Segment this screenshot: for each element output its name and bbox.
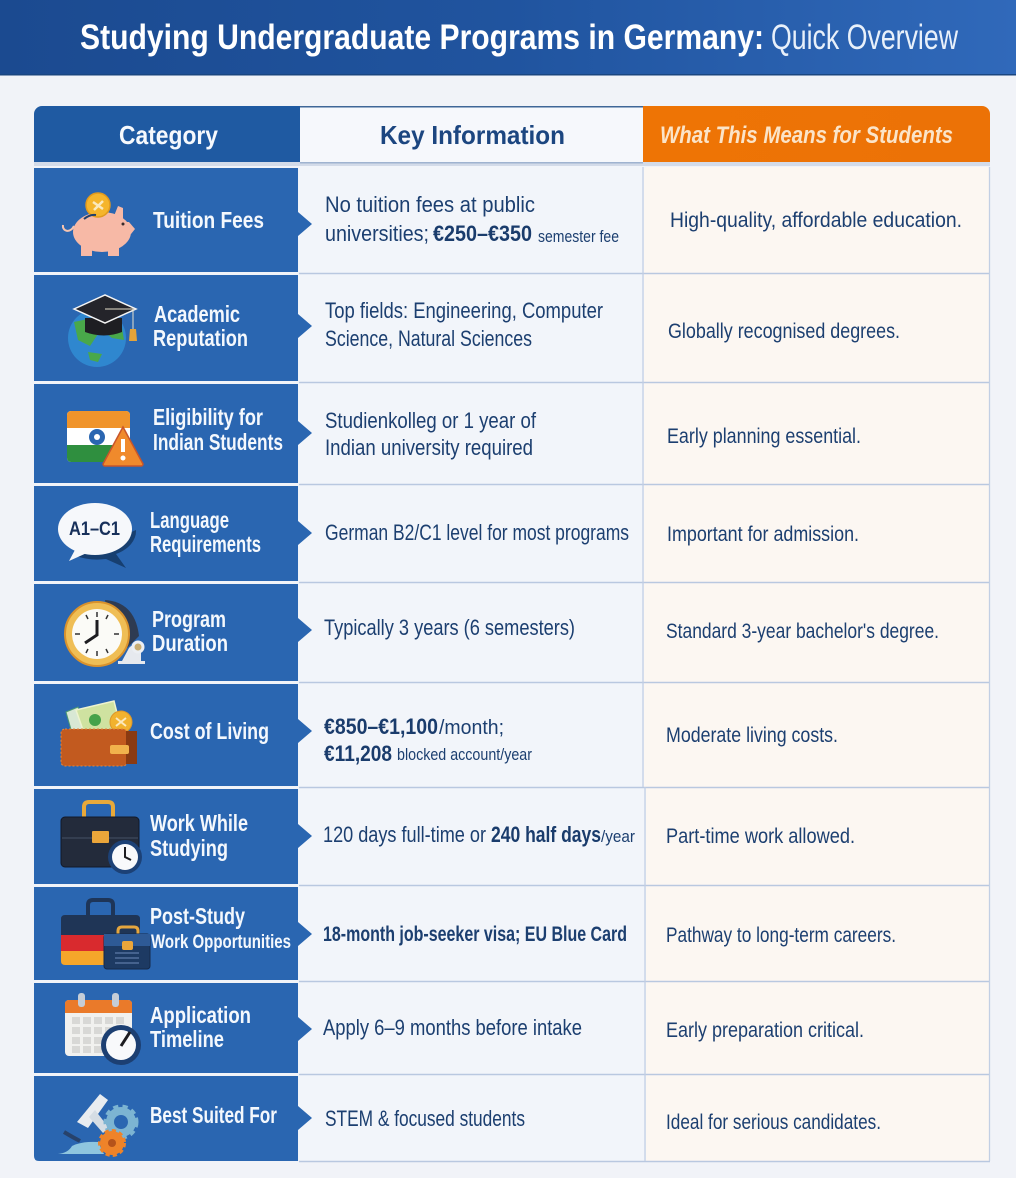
row 9: application timeline — [34, 983, 864, 1073]
icon: Indian flag with warning — [67, 411, 143, 466]
label: Timeline — [150, 1026, 224, 1052]
row 3: eligibility — [34, 384, 861, 483]
key information: 18-month job-seeker visa; EU Blue Card — [323, 923, 627, 946]
label: Application — [150, 1002, 251, 1028]
row 10: best suited for — [34, 1076, 881, 1161]
key information — [325, 408, 537, 460]
category cell — [34, 983, 312, 1073]
student meaning: Pathway to long-term careers. — [666, 924, 896, 947]
key information: €250–€350 — [433, 221, 532, 246]
label: Cost of Living — [150, 718, 269, 744]
icon: microscope and gears — [58, 1094, 136, 1155]
label: Program — [152, 606, 226, 632]
key information: Indian university required — [325, 435, 533, 460]
key information: STEM & focused students — [325, 1106, 525, 1131]
icon: briefcase with clock — [61, 802, 142, 874]
icon: speech bubble: A1–C1 — [69, 519, 120, 540]
row 1: tuition fees — [34, 168, 962, 272]
icon: piggy bank — [63, 193, 135, 256]
key information: blocked account/year — [397, 745, 532, 764]
category cell — [34, 684, 312, 786]
label — [150, 1002, 251, 1052]
key information: universities; — [325, 221, 429, 246]
key information: /month; — [439, 717, 504, 739]
table background columns — [299, 166, 990, 1162]
key information: German B2/C1 level for most programs — [325, 520, 629, 545]
category cell — [34, 384, 312, 483]
student meaning: High-quality, affordable education. — [670, 209, 962, 232]
title text: Quick Overview — [771, 18, 959, 57]
student meaning: Important for admission. — [667, 523, 859, 546]
title text: Studying Undergraduate Programs in Germany: — [80, 18, 764, 57]
key information: Typically 3 years (6 semesters) — [324, 615, 575, 640]
key information: Apply 6–9 months before intake — [323, 1015, 582, 1040]
key information: €850–€1,100 — [324, 714, 438, 739]
row 5: duration — [34, 584, 939, 681]
student meaning: Globally recognised degrees. — [668, 320, 900, 343]
icon: German flag briefcases — [61, 900, 150, 969]
label — [150, 507, 261, 557]
category cell — [34, 584, 312, 681]
label: Indian Students — [153, 429, 283, 455]
student meaning: Ideal for serious candidates. — [666, 1111, 881, 1134]
row 6: cost of living — [34, 684, 838, 786]
label — [153, 301, 248, 351]
icon: clock — [65, 600, 145, 666]
row 8: post-study work — [34, 887, 896, 980]
label: Duration — [152, 630, 228, 656]
label — [150, 903, 291, 953]
icon: wallet with money — [61, 701, 137, 766]
category cell — [34, 168, 312, 272]
label: Academic — [154, 301, 240, 327]
row 4: language — [34, 486, 859, 581]
student meaning: Early planning essential. — [667, 425, 861, 448]
header: key information — [300, 106, 643, 164]
header: what this means for students — [643, 106, 990, 162]
icon: globe with graduation cap — [68, 295, 137, 367]
key information: 240 half days — [491, 822, 601, 847]
label: Work Opportunities — [151, 932, 291, 953]
label — [150, 810, 248, 861]
key information: 120 days full-time or — [323, 822, 486, 847]
category cell — [34, 1076, 312, 1161]
key information: semester fee — [538, 227, 619, 246]
key information — [325, 298, 603, 351]
icon: calendar with clock — [65, 993, 141, 1065]
key information — [323, 822, 635, 847]
header: category: Category — [119, 120, 218, 150]
icon: speech bubble — [58, 503, 136, 568]
key information: Studienkolleg or 1 year of — [325, 408, 537, 433]
key information: /year — [601, 827, 635, 846]
label: Studying — [150, 835, 228, 861]
label: Best Suited For — [150, 1102, 277, 1128]
label: Eligibility for — [153, 404, 263, 430]
label: Requirements — [150, 531, 261, 557]
label: Post-Study — [150, 903, 245, 929]
student meaning: Part-time work allowed. — [666, 825, 855, 848]
key information — [324, 714, 532, 766]
label: Reputation — [153, 325, 248, 351]
title banner — [0, 0, 1016, 76]
student meaning: Standard 3-year bachelor's degree. — [666, 620, 939, 643]
header: what this means for students: What This Means for Students — [660, 122, 953, 149]
label — [152, 606, 228, 656]
table header row — [34, 106, 990, 166]
category cell — [34, 486, 312, 581]
label: Language — [150, 507, 229, 533]
key information: Science, Natural Sciences — [325, 326, 532, 351]
category cell — [34, 275, 312, 381]
category cell — [34, 887, 312, 980]
label: Work While — [150, 810, 248, 836]
row 7: work while studying — [34, 789, 855, 884]
key information: €11,208 — [324, 741, 392, 766]
header: key information: Key Information — [380, 120, 565, 150]
header: category — [34, 106, 300, 162]
key information: Top fields: Engineering, Computer — [325, 298, 603, 323]
student meaning: Early preparation critical. — [666, 1019, 864, 1042]
student meaning: Moderate living costs. — [666, 724, 838, 747]
key information — [325, 192, 619, 246]
row 2: academic reputation — [34, 275, 900, 381]
label: Tuition Fees — [153, 207, 264, 233]
label — [153, 404, 283, 455]
key information: No tuition fees at public — [325, 192, 535, 217]
category cell — [34, 789, 312, 884]
